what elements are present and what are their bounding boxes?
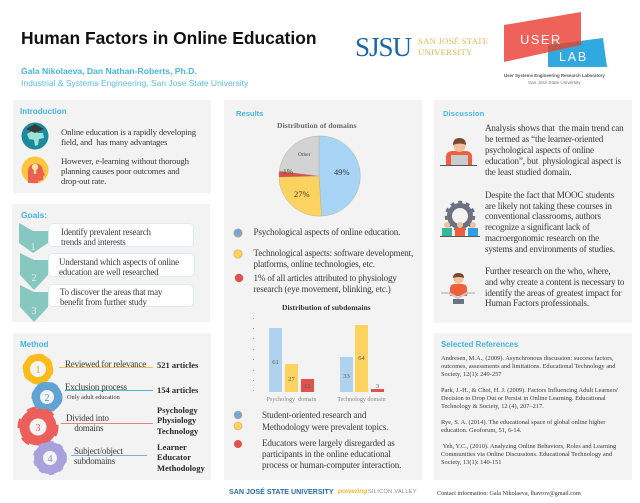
goal card 3 — [48, 284, 194, 307]
text: despite: macroergonomic research on the — [485, 233, 599, 243]
legend dot: psychology — [234, 228, 242, 238]
User Lab logo: User Systems Engineering Research Laboratory — [504, 73, 605, 78]
connector lines — [59, 367, 153, 456]
reference 4: Communities via Online Discussions. Educational Technology and — [441, 451, 612, 458]
step 4 label — [74, 446, 123, 466]
footer: SJSU tagline: SILICON VALLEY — [368, 489, 417, 495]
text: analysis — [485, 123, 624, 177]
step 4 outcome: Methodology — [157, 463, 205, 473]
text: analysis: Analysis shows that the main trend can — [485, 123, 623, 133]
heading: results: Results — [236, 109, 263, 118]
chevron 3 — [20, 285, 48, 322]
text: online education: Online education is a rapidly developing — [61, 126, 196, 136]
text: technological aspects: platforms, online technologies, etc. — [254, 259, 375, 269]
step 4 label: Subject/object — [74, 446, 123, 456]
pie chart: 1% — [283, 167, 293, 176]
text: physiology: research (eye movement, blinking, etc.) — [254, 284, 391, 294]
authors: Gala Nikolaeva, Dan Nathan-Roberts, Ph.D. — [21, 66, 197, 76]
reference 1: outcomes, assessments and limitations. Educational Technology and — [441, 363, 615, 370]
step 3 label: domains — [74, 423, 103, 433]
bar chart — [253, 318, 386, 403]
bar chart: 64 — [358, 355, 366, 362]
chevron 2 — [20, 253, 48, 290]
reference 2: Technology & Society, 12 (4), 207–217. — [441, 403, 544, 410]
heading: method: Method — [20, 340, 48, 349]
text: technological aspects: Technological aspects: software development, — [254, 248, 413, 258]
chevron 2: 2 — [32, 273, 36, 284]
bar chart: 12 — [304, 383, 311, 390]
text: analysis: education”, but physiological aspect is — [485, 156, 621, 166]
reference 2: Park, J.-H., & Choi, H. J. (2009). Factors Influencing Adult Learners' — [441, 387, 618, 394]
gear 2 — [32, 382, 62, 412]
text: despite: recognize a significant lack of — [485, 222, 590, 232]
legend dot: technology — [233, 250, 243, 258]
step 2 count: 154 articles — [157, 385, 198, 395]
text: online education: field, and has many advantages — [61, 137, 167, 147]
text: further research: identify the areas of greatest impact for — [485, 288, 621, 298]
panel: goals — [12, 204, 210, 322]
panel: results — [224, 100, 422, 480]
gear 4: 4 — [48, 454, 52, 465]
step 2 label: Exclusion process — [65, 382, 127, 392]
goal card 2 — [48, 253, 195, 277]
goal text 3: To discover the areas that may — [60, 286, 162, 296]
legend dot: methodology — [234, 422, 242, 430]
text: prevalent topics: Student-oriented research and — [262, 410, 366, 420]
text: however: planning causes poor outcomes and — [61, 166, 179, 176]
step 4 label: subdomains — [74, 456, 115, 466]
text: psychological aspects: Psychological aspects of online education. — [254, 227, 400, 237]
gear 3 — [18, 406, 58, 446]
text: technological aspects — [254, 248, 413, 269]
icon: head with lightbulb — [22, 156, 48, 184]
panel: introduction — [13, 100, 211, 193]
reference 4: Society, 13(1): 140-151 — [441, 459, 501, 466]
footer: SJSU tagline — [229, 488, 419, 500]
User Lab logo — [504, 12, 607, 85]
text: educators disregarded: process or human-computer interaction. — [262, 460, 401, 470]
goal text 2 — [59, 256, 179, 277]
text: however: drop-out rate. — [61, 176, 106, 186]
pie chart: 49% — [334, 167, 350, 177]
bar chart: 27 — [288, 376, 296, 383]
goal text 3 — [60, 286, 162, 307]
text: physiology — [254, 273, 397, 294]
icon: gear and team — [440, 200, 480, 237]
pie chart: 27% — [294, 189, 310, 199]
bar chart: Psychology domain — [267, 397, 316, 403]
step 1 label: Reviewed for relevance — [65, 358, 146, 368]
text: further research: Further research on the who, where, — [485, 266, 610, 276]
text: educators disregarded — [262, 438, 401, 470]
panel: discussion — [434, 100, 632, 323]
text: further research: Human Factors professionals. — [485, 298, 589, 308]
reference 4 — [441, 443, 616, 468]
step 4 outcome: Educator — [157, 452, 191, 462]
footer: SJSU tagline: powering — [338, 488, 367, 495]
step 3 outcome: Physiology — [157, 415, 196, 425]
heading: goals: Goals: — [21, 210, 47, 220]
User Lab logo: LAB — [559, 50, 588, 64]
text: despite — [485, 190, 615, 254]
gear 2: 2 — [44, 393, 50, 404]
reference 4: Yeh, Y.C., (2010). Analyzing Online Behaviors, Roles and Learning — [443, 443, 616, 450]
legend dot: physiology — [234, 274, 244, 282]
step 3 outcome: Technology — [157, 426, 198, 436]
goal text 3: benefit from further study — [60, 297, 147, 307]
step 3 label: Divided into — [66, 413, 109, 423]
User Lab logo: San José State University — [528, 80, 581, 85]
reference 1 — [441, 355, 616, 378]
SJSU logo: SAN JOSÉ STATE — [418, 36, 488, 46]
text: analysis: psychological aspects of online — [485, 145, 594, 155]
legend dot: student — [234, 410, 242, 420]
heading: discussion: Discussion — [443, 109, 484, 118]
reference 2 — [441, 387, 618, 412]
reference 2: Decision to Drop Out or Persist in Online Learning. Educational — [441, 395, 606, 402]
reference 3: Rye, S. A. (2014). The educational space of global online higher — [441, 419, 605, 426]
SJSU logo: UNIVERSITY — [418, 47, 473, 57]
reference 1: Andresen, M.A., (2009). Asynchronous discussion: success factors, — [441, 355, 614, 362]
goal text 2: Understand which aspects of online — [59, 256, 179, 266]
step 3 label — [66, 413, 109, 433]
gear 1 — [22, 354, 54, 384]
text: further research: and why create a content is necessary to — [485, 277, 624, 287]
panel: references — [434, 333, 632, 480]
reference 3 — [441, 419, 605, 435]
text: prevalent topics: Methodology were prevalent topics. — [262, 422, 388, 432]
footer: SJSU tagline: SAN JOSÉ STATE UNIVERSITY — [229, 488, 334, 496]
text: analysis: the least studied domain. — [485, 167, 571, 177]
bar chart: 61 — [272, 359, 279, 366]
text: however — [61, 156, 189, 186]
User Lab logo: USER — [520, 32, 562, 47]
step 4 outcome — [157, 442, 205, 473]
gear 3: 3 — [36, 423, 40, 434]
SJSU logo: SJSU — [355, 32, 411, 62]
legend dot: educator — [234, 440, 242, 448]
text: educators disregarded: Educators were largely disregarded as — [262, 438, 395, 448]
goal text 1: Identify prevalent research — [61, 226, 151, 236]
text: despite: Despite the fact that MOOC students — [485, 190, 614, 200]
reference 1: Society, 12(1): 249-257 — [441, 371, 501, 378]
chevron 3: 3 — [32, 306, 36, 317]
pie chart: Other — [298, 152, 311, 158]
goal card 1 — [48, 223, 194, 247]
step 3 outcome — [157, 405, 198, 436]
panel: method — [13, 333, 211, 480]
pie chart title: Distribution of domains — [277, 120, 357, 130]
step 4 outcome: Learner — [157, 442, 187, 452]
goal text 1: trends and interests — [61, 237, 126, 247]
goal text 2: education are well researched — [59, 267, 158, 277]
icon: person at laptop — [440, 138, 477, 166]
text: educators disregarded: participants in the online educational — [262, 449, 391, 459]
pie chart — [278, 136, 360, 216]
bar chart: 33 — [343, 373, 350, 380]
step 2 note: Only adult education — [67, 394, 120, 401]
text: despite: conventional classrooms, authors — [485, 211, 601, 221]
chevron 1: 1 — [30, 242, 36, 253]
icon: person with network — [441, 273, 475, 304]
gear 4 — [33, 441, 67, 475]
title: Human Factors in Online Education — [21, 28, 317, 48]
text: analysis: be termed as “the learner-oriented — [485, 134, 603, 144]
icon: globe with graduation cap — [22, 122, 48, 150]
reference 3: education. Geoforum, 51, 6-14. — [441, 427, 521, 434]
bar chart: 3 — [376, 383, 379, 390]
heading: introduction: Introduction — [20, 107, 67, 116]
goal text 1 — [61, 226, 151, 247]
step 1 count: 521 articles — [157, 360, 198, 370]
contact information: Contact information: Gala Nikolaeva, lhavrov@gmail.com — [437, 491, 581, 497]
text: further research — [485, 266, 624, 308]
gear 1: 1 — [36, 365, 40, 376]
bar chart: Technology domain — [337, 397, 386, 403]
SJSU logo — [355, 32, 488, 62]
bar chart title: Distribution of subdomains — [282, 303, 371, 312]
text: prevalent topics — [262, 410, 388, 432]
affiliation: Industrial & Systems Engineering, San Jose State University — [21, 78, 248, 88]
heading: references: Selected References — [441, 340, 518, 349]
text: despite: systems and environments of studies. — [485, 244, 615, 254]
text: physiology: 1% of all articles attributed to physiology — [254, 273, 397, 283]
text: however: However, e-learning without thorough — [61, 156, 189, 166]
text: despite: are likely not taking these courses in — [485, 201, 612, 211]
step 3 outcome: Psychology — [157, 405, 198, 415]
text: online education — [61, 126, 196, 147]
chevron 1 — [19, 223, 48, 253]
